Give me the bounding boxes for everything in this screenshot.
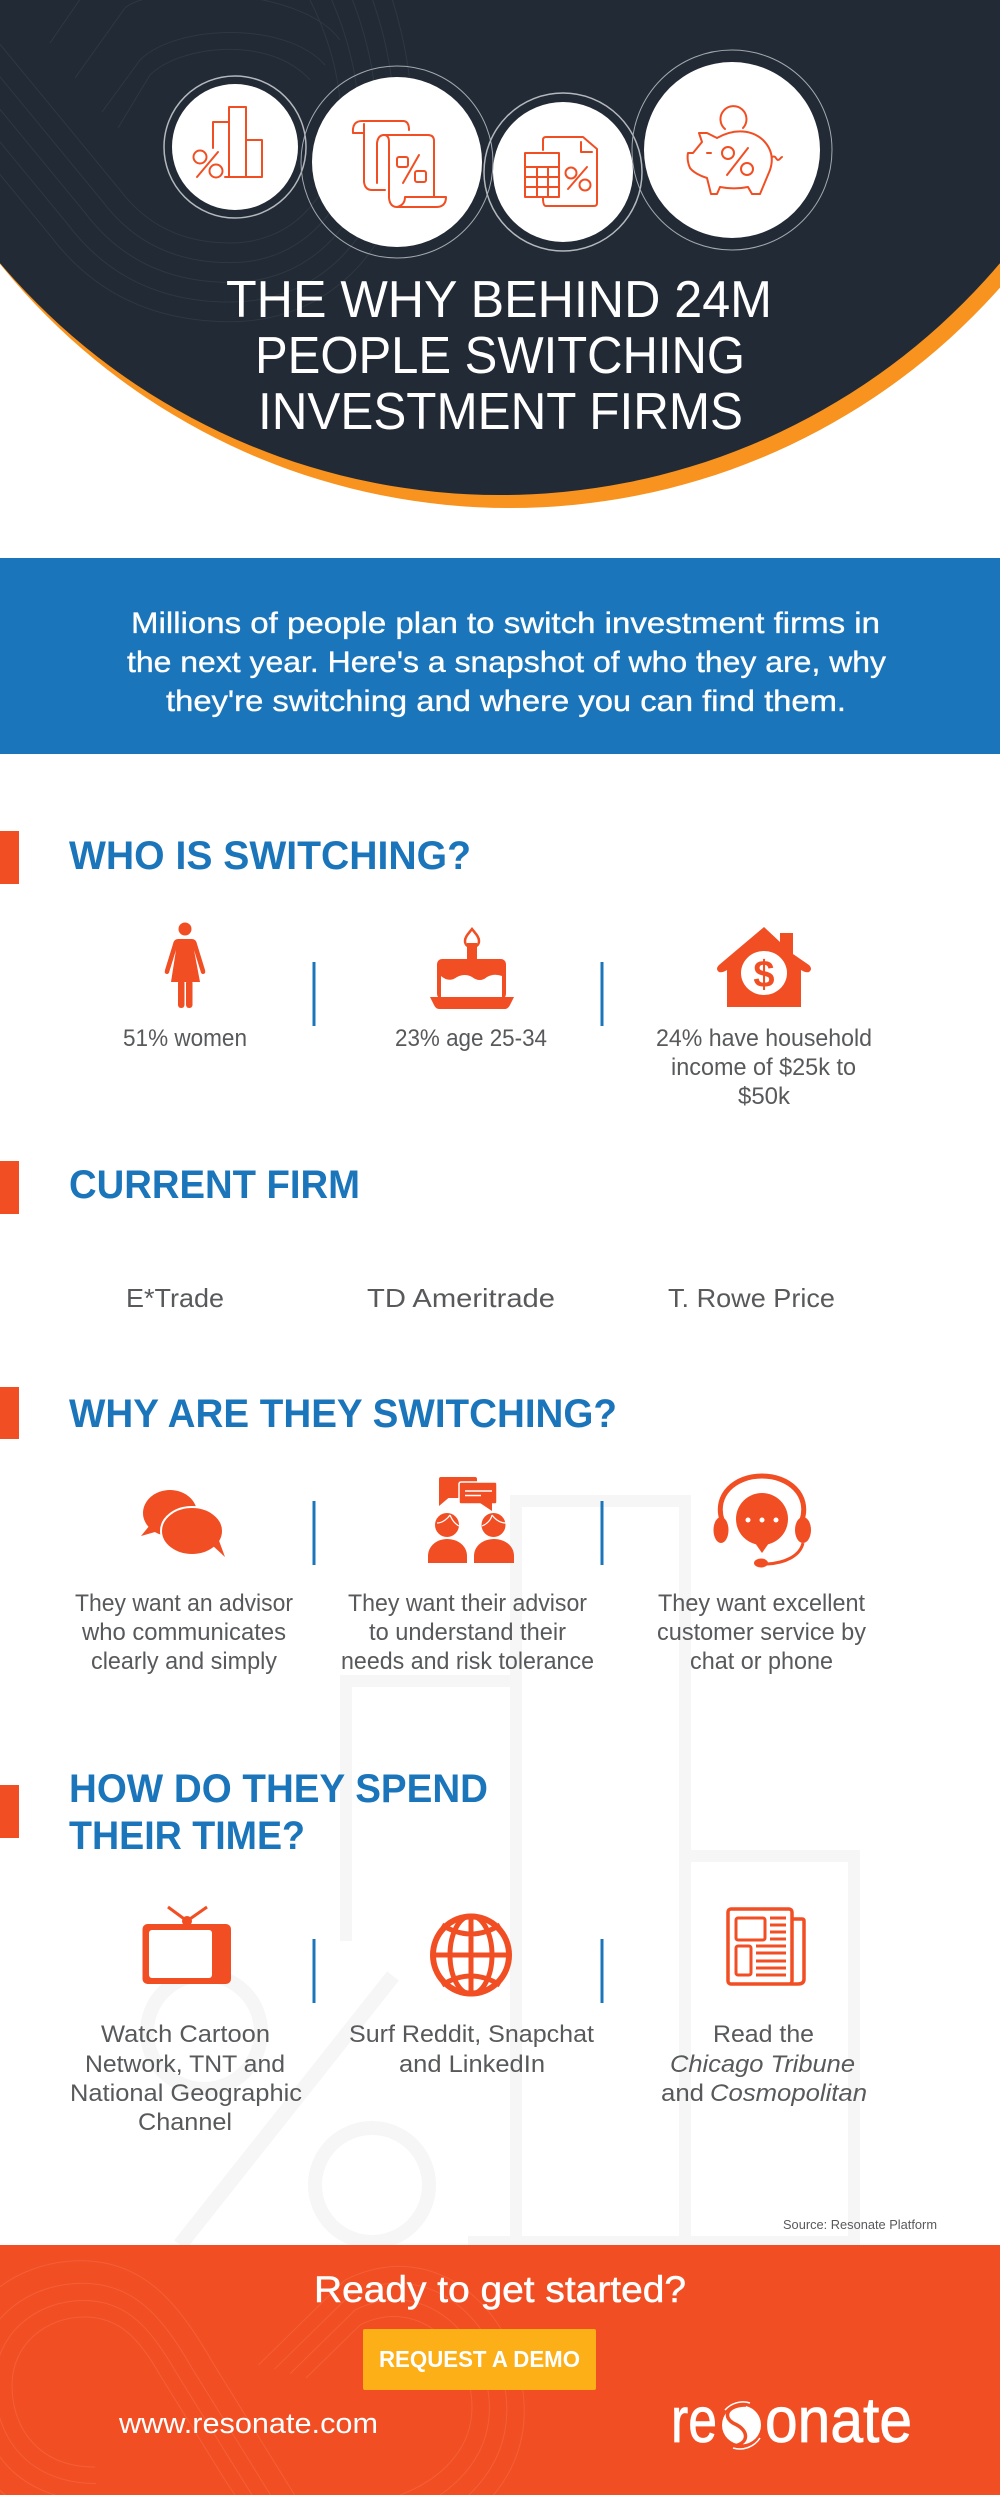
heading: how do they spend their time: HOW DO THEY SPEND [69,1767,488,1811]
text: understand needs [341,1590,594,1675]
current firm names: TD Ameritrade [367,1283,555,1313]
panel: blue intro band: Millions of people plan to switch investment firms in [131,607,880,640]
text: customer service [657,1590,866,1675]
icon: speech bubbles [141,1490,225,1557]
icon circle: bar chart percent [164,76,306,218]
text: household income: $50k [738,1083,791,1110]
text: watch [70,2021,302,2136]
footer heading: Ready to get started? [314,2269,686,2310]
text: household income: income of $25k to [671,1054,856,1081]
icon: television [142,1907,231,1984]
text: surf: and LinkedIn [399,2051,545,2078]
text: read: Read the [713,2021,814,2048]
logo: resonate [671,2384,912,2456]
text: household income: 24% have household [656,1025,872,1052]
background watermark: percent and bars [147,1501,860,2245]
text: surf [349,2021,594,2078]
panel: blue intro band: they're switching and where you can find them. [166,685,846,718]
text: watch: National Geographic [70,2080,302,2107]
source note: Source: Resonate Platform [783,2217,937,2232]
panel: footer [0,2245,1000,2495]
icon: house with dollar [717,927,811,1007]
icon: two people talking [428,1477,514,1563]
icon circle: calculator and document [484,93,642,251]
button: request a demo: REQUEST A DEMO [379,2346,580,2372]
text: understand needs: to understand their [369,1619,566,1646]
text: household income [656,1025,872,1110]
panel: blue intro band [0,558,1000,754]
text: surf: Surf Reddit, Snapchat [349,2021,594,2048]
title: INVESTMENT FIRMS [258,383,743,441]
logo: resonate: onate [765,2384,912,2456]
text: read: and [661,2080,704,2107]
title: THE WHY BEHIND 24M [226,271,772,329]
text: watch: Channel [138,2109,232,2136]
website url: www.resonate.com [118,2408,378,2440]
text: watch: Network, TNT and [85,2051,285,2078]
icon: house with dollar: $ [753,954,775,996]
heading: who is switching: WHO IS SWITCHING? [69,834,471,878]
button: request a demo [363,2329,596,2390]
heading: current firm: CURRENT FIRM [69,1163,360,1207]
icon: newspaper [728,1909,804,1984]
text: understand needs: needs and risk tolerance [341,1648,594,1675]
heading: how do they spend their time: THEIR TIME? [69,1814,305,1858]
current firm names [126,1283,835,1313]
text: 23% age 25-34: 23% age 25-34 [395,1025,547,1052]
logo: resonate: re [671,2384,717,2456]
heading: how do they spend their time [0,1767,488,1858]
text: customer service: They want excellent [658,1590,865,1617]
icon circle: piggy bank [632,50,832,250]
title [226,271,772,441]
text: advisor communicates: who communicates [81,1619,286,1646]
header: dark curved panel [0,0,1000,508]
text: watch: Watch Cartoon [101,2021,270,2048]
heading: who is switching [0,831,471,884]
text: advisor communicates: clearly and simply [91,1648,277,1675]
dividers: how [312,1939,604,2003]
icon: woman [165,922,205,1008]
text: understand needs: They want their advisor [348,1590,587,1617]
text: 51% women: 51% women [123,1025,247,1052]
text: customer service: customer service by [657,1619,866,1646]
text: advisor communicates [75,1590,293,1675]
text: advisor communicates: They want an advisor [75,1590,293,1617]
text: customer service: chat or phone [690,1648,833,1675]
icon: birthday cake [430,929,514,1009]
panel: blue intro band: the next year. Here's a snapshot of who they are, why [127,646,886,679]
text: read [661,2021,867,2107]
dividers: why [312,1501,604,1565]
current firm names: E*Trade [126,1283,224,1313]
title: PEOPLE SWITCHING [255,327,745,385]
dividers: who [312,962,604,1026]
text: read: Chicago Tribune [670,2051,855,2078]
icon circle: scroll percent [301,66,493,258]
current firm names: T. Rowe Price [668,1283,835,1313]
icon: headset [714,1476,811,1568]
heading: current firm [0,1161,360,1214]
heading: why are they switching: WHY ARE THEY SWITCHING? [69,1392,617,1436]
icon: globe [432,1916,510,1994]
text: read: Cosmopolitan [710,2080,867,2107]
